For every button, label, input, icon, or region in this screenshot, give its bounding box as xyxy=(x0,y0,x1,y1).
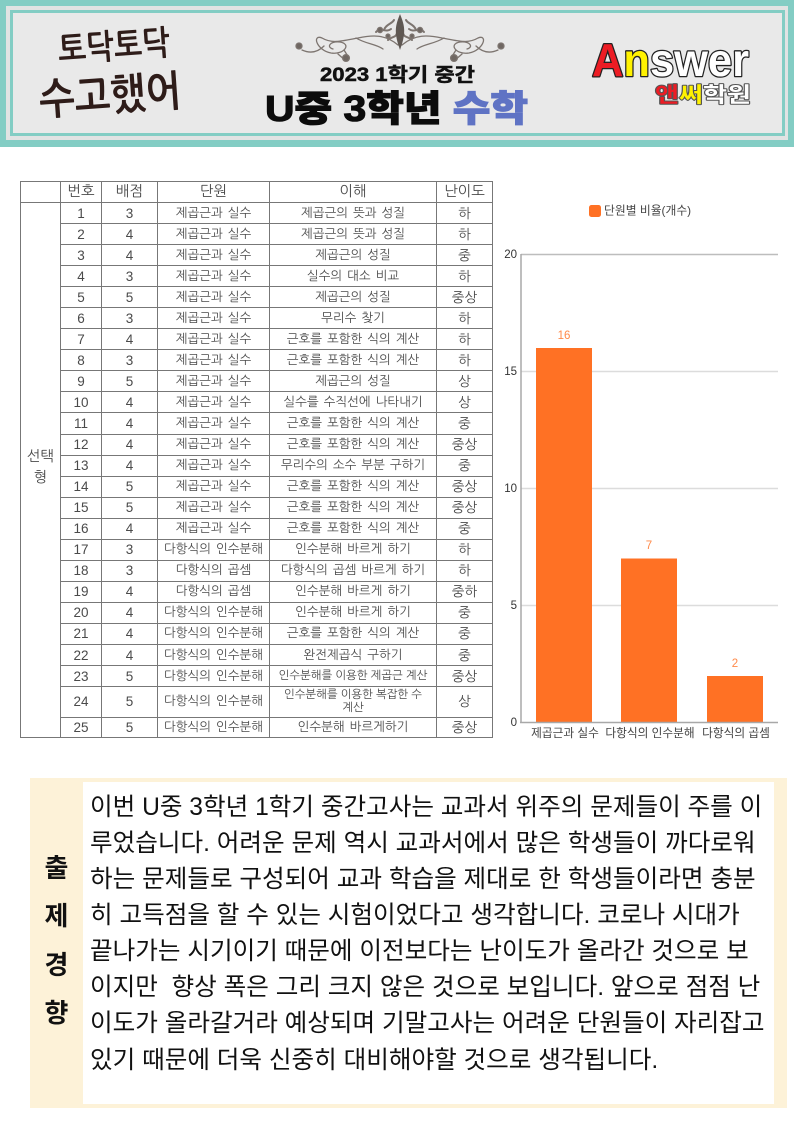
exam question table: 제곱근과 실수 xyxy=(176,248,251,262)
exam question table: 5 xyxy=(126,720,133,735)
exam question table: 6 xyxy=(77,311,85,326)
handwritten message xyxy=(38,25,182,122)
legend: 단원별 비율(개수) xyxy=(604,204,691,218)
exam question table: 인수분해 바르게 하기 xyxy=(295,542,411,556)
exam question table: 4 xyxy=(126,332,133,347)
exam question table: 제곱근과 실수 xyxy=(176,479,251,493)
exam question table: 실수의 대소 비교 xyxy=(307,269,399,283)
exam question table: 근호를 포함한 식의 계산 xyxy=(287,353,419,367)
exam question table: 10 xyxy=(73,395,89,410)
exam question table: 선택 xyxy=(27,449,54,465)
exam question table: 상 xyxy=(458,694,471,709)
exam question table: 22 xyxy=(73,648,89,662)
commentary text: 하는 문제들로 구성되어 교과 학습을 제대로 한 학생들이라면 충분 xyxy=(90,866,756,893)
heading: exam trend: 향 xyxy=(45,993,68,1030)
exam question table: 형 xyxy=(34,470,47,486)
exam question table: 8 xyxy=(77,353,85,368)
exam question table: 16 xyxy=(73,521,89,536)
heading: exam trend: 출 xyxy=(45,848,68,885)
exam question table: 4 xyxy=(126,395,133,410)
logo: Answer academy: 앤써학원 xyxy=(655,84,751,107)
exam question table: 근호를 포함한 식의 계산 xyxy=(287,332,419,346)
y axis labels: 20 xyxy=(504,249,517,261)
exam question table: 근호를 포함한 식의 계산 xyxy=(287,521,419,535)
exam question table: 제곱근과 실수 xyxy=(176,374,251,388)
exam question table: 근호를 포함한 식의 계산 xyxy=(287,500,419,514)
exam question table: 단원 xyxy=(200,184,227,200)
exam question table: 제곱근과 실수 xyxy=(176,437,251,451)
exam question table: 5 xyxy=(126,500,133,515)
exam question table: 다항식의 곱셈 xyxy=(176,563,251,577)
exam question table: 하 xyxy=(458,542,471,557)
exam question table: 인수분해 바르게하기 xyxy=(298,720,408,734)
exam question table: 중상 xyxy=(452,479,477,494)
logo: Answer academy: Answer xyxy=(592,34,749,86)
exam question table: 근호를 포함한 식의 계산 xyxy=(287,437,419,451)
exam question table: 중 xyxy=(458,521,471,536)
exam question table: 제곱근과 실수 xyxy=(176,206,251,220)
exam question table: 인수분해 바르게 하기 xyxy=(295,584,411,598)
exam question table: 완전제곱식 구하기 xyxy=(304,648,402,662)
exam question table: 제곱근의 성질 xyxy=(315,290,391,304)
exam question table: 4 xyxy=(126,648,133,662)
exam question table: 3 xyxy=(126,542,133,557)
exam question table: 4 xyxy=(126,521,133,536)
axes xyxy=(520,254,778,723)
heading: exam trend: 제 xyxy=(45,896,68,933)
value labels: 16 xyxy=(558,330,570,342)
exam question table: 19 xyxy=(73,584,89,599)
exam question table: 중 xyxy=(458,458,471,473)
exam question table: 21 xyxy=(73,626,89,641)
commentary text: 있기 때문에 더욱 신중히 대비해야할 것으로 생각됩니다. xyxy=(90,1047,658,1074)
exam question table: 난이도 xyxy=(444,184,485,200)
exam question table: 14 xyxy=(73,479,89,494)
exam question table: 2 xyxy=(77,227,85,242)
value labels: 7 xyxy=(646,540,652,552)
exam question table: 5 xyxy=(77,290,85,305)
exam question table: 하 xyxy=(458,206,471,221)
exam question table: 제곱근의 뜻과 성질 xyxy=(301,227,405,241)
exam question table: 제곱근과 실수 xyxy=(176,227,251,241)
exam question table: 제곱근과 실수 xyxy=(176,269,251,283)
exam question table: 4 xyxy=(126,416,133,431)
exam question table: 4 xyxy=(126,248,133,263)
exam question table: 4 xyxy=(77,269,85,284)
exam question table: 제곱근의 뜻과 성질 xyxy=(301,206,405,220)
commentary text: 이도가 올라갈거라 예상되며 기말고사는 어려운 단원들이 자리잡고 xyxy=(90,1010,765,1037)
exam question table: 제곱근의 성질 xyxy=(315,374,391,388)
exam question table: 중상 xyxy=(452,437,477,452)
exam question table: 다항식의 곱셈 바르게 하기 xyxy=(281,563,425,577)
category labels xyxy=(531,727,770,740)
exam question table: 4 xyxy=(126,227,133,242)
exam question table: 중상 xyxy=(452,669,477,684)
y axis labels xyxy=(504,249,517,729)
exam question table: 3 xyxy=(126,206,133,221)
exam question table: 다항식의 인수분해 xyxy=(164,626,263,640)
exam question table: 제곱근과 실수 xyxy=(176,395,251,409)
exam question table: 다항식의 인수분해 xyxy=(164,542,263,556)
exam question table: 15 xyxy=(73,500,89,515)
exam question table: 4 xyxy=(126,584,133,599)
exam question table: 하 xyxy=(458,563,471,578)
exam question table: 중 xyxy=(458,416,471,431)
exam question table: 제곱근과 실수 xyxy=(176,458,251,472)
exam question table: 제곱근과 실수 xyxy=(176,290,251,304)
exam question table: 3 xyxy=(126,311,133,326)
exam question table: 다항식의 인수분해 xyxy=(164,605,263,619)
panel: exam trend xyxy=(30,778,787,1108)
exam question table: 4 xyxy=(126,458,133,473)
exam question table: 9 xyxy=(77,374,85,389)
exam question table: 하 xyxy=(458,269,471,284)
exam question table: 12 xyxy=(73,437,89,452)
exam question table: 5 xyxy=(126,694,133,709)
header banner xyxy=(0,0,794,147)
exam question table: 다항식의 인수분해 xyxy=(164,720,263,734)
exam question table: 5 xyxy=(126,669,133,684)
exam question table: 18 xyxy=(73,563,89,578)
exam question table: 배점 xyxy=(116,184,143,200)
bars xyxy=(536,348,763,722)
exam question table: 중상 xyxy=(452,290,477,305)
exam question table: 근호를 포함한 식의 계산 xyxy=(287,416,419,430)
exam question table xyxy=(20,181,493,738)
exam question table: 7 xyxy=(77,332,85,347)
exam question table: 중 xyxy=(458,605,471,620)
exam question table: 제곱근과 실수 xyxy=(176,521,251,535)
commentary text: 끝나가는 시기이기 때문에 이전보다는 난이도가 올라간 것으로 보 xyxy=(90,938,749,965)
exam question table: 11 xyxy=(74,416,88,431)
exam question table: 중 xyxy=(458,626,471,641)
category labels: 제곱근과 실수 xyxy=(531,727,599,740)
exam question table: 하 xyxy=(458,353,471,368)
exam question table: 제곱근과 실수 xyxy=(176,311,251,325)
subtitle: 2023 1학기 중간 xyxy=(320,64,475,86)
ornament xyxy=(296,14,504,61)
commentary text: 루었습니다. 어려운 문제 역시 교과서에서 많은 학생들이 까다로워 xyxy=(90,830,756,857)
exam question table: 무리수 찾기 xyxy=(321,311,385,325)
y axis labels: 0 xyxy=(511,717,517,729)
exam question table: 계산 xyxy=(342,702,364,714)
exam question table: 인수분해를 이용한 제곱근 계산 xyxy=(279,670,427,682)
heading: exam trend xyxy=(45,848,68,1030)
exam question table: 3 xyxy=(77,248,85,263)
exam question table: 25 xyxy=(73,720,89,735)
exam question table: 5 xyxy=(126,479,133,494)
exam question table: 3 xyxy=(126,563,133,578)
exam question table: 5 xyxy=(126,290,133,305)
exam question table: 3 xyxy=(126,353,133,368)
exam question table: 인수분해 바르게 하기 xyxy=(295,605,411,619)
exam question table: 4 xyxy=(126,605,133,620)
exam question table: 이해 xyxy=(339,184,367,200)
exam question table: 3 xyxy=(126,269,133,284)
exam question table: 중 xyxy=(458,648,471,662)
commentary text: 이번 U중 3학년 1학기 중간고사는 교과서 위주의 문제들이 주를 이 xyxy=(90,794,762,821)
commentary text: 히 고득점을 할 수 있는 시험이었다고 생각합니다. 코로나 시대가 xyxy=(90,902,740,929)
exam question table: 중하 xyxy=(452,584,477,599)
handwritten message: 토닥토닥 xyxy=(57,25,171,68)
exam question table: 근호를 포함한 식의 계산 xyxy=(287,479,419,493)
bar chart: questions per unit xyxy=(504,204,778,740)
y axis labels: 10 xyxy=(504,483,517,495)
exam question table: 20 xyxy=(73,605,89,620)
exam question table: 번호 xyxy=(67,184,95,200)
exam question table: 23 xyxy=(73,669,89,684)
exam question table: 상 xyxy=(458,395,471,410)
exam question table: 1 xyxy=(77,206,85,221)
value labels: 2 xyxy=(732,658,738,670)
exam question table: 17 xyxy=(73,542,89,557)
exam question table: 하 xyxy=(458,311,471,326)
exam question table: 근호를 포함한 식의 계산 xyxy=(287,626,419,640)
value labels xyxy=(558,330,738,670)
exam question table: 다항식의 곱셈 xyxy=(176,584,251,598)
exam question table: 중상 xyxy=(452,500,477,515)
heading: exam trend: 경 xyxy=(45,945,68,982)
exam question table: 다항식의 인수분해 xyxy=(164,669,263,683)
exam question table: 4 xyxy=(126,437,133,452)
exam question table: 하 xyxy=(458,227,471,242)
exam question table: 중 xyxy=(458,248,471,263)
exam question table: 인수분해를 이용한 복잡한 수 xyxy=(284,689,422,701)
exam question table: 중상 xyxy=(452,720,477,735)
exam question table: 하 xyxy=(458,332,471,347)
exam question table: 제곱근의 성질 xyxy=(315,248,391,262)
commentary text: 이지만 향상 폭은 그리 크지 않은 것으로 보입니다. 앞으로 점점 난 xyxy=(90,974,760,1001)
exam question table: 제곱근과 실수 xyxy=(176,500,251,514)
exam question table: 5 xyxy=(126,374,133,389)
exam question table: 제곱근과 실수 xyxy=(176,353,251,367)
exam question table: 다항식의 인수분해 xyxy=(164,694,263,708)
exam question table: 다항식의 인수분해 xyxy=(164,648,263,662)
exam question table: 상 xyxy=(458,374,471,389)
y axis labels: 5 xyxy=(511,600,517,612)
category labels: 다항식의 곱셈 xyxy=(702,727,770,740)
exam question table: 4 xyxy=(126,626,133,641)
category labels: 다항식의 인수분해 xyxy=(605,727,695,740)
exam question table: 실수를 수직선에 나타내기 xyxy=(283,395,423,409)
exam question table: 제곱근과 실수 xyxy=(176,416,251,430)
exam question table: 제곱근과 실수 xyxy=(176,332,251,346)
exam question table: 무리수의 소수 부분 구하기 xyxy=(281,458,425,472)
commentary background xyxy=(83,782,774,1104)
handwritten message: 수고했어 xyxy=(38,69,182,122)
title: U중 3학년 수학 xyxy=(265,88,528,129)
exam question table: 13 xyxy=(73,458,89,473)
y axis labels: 15 xyxy=(504,366,517,378)
exam question table: 24 xyxy=(73,694,89,709)
